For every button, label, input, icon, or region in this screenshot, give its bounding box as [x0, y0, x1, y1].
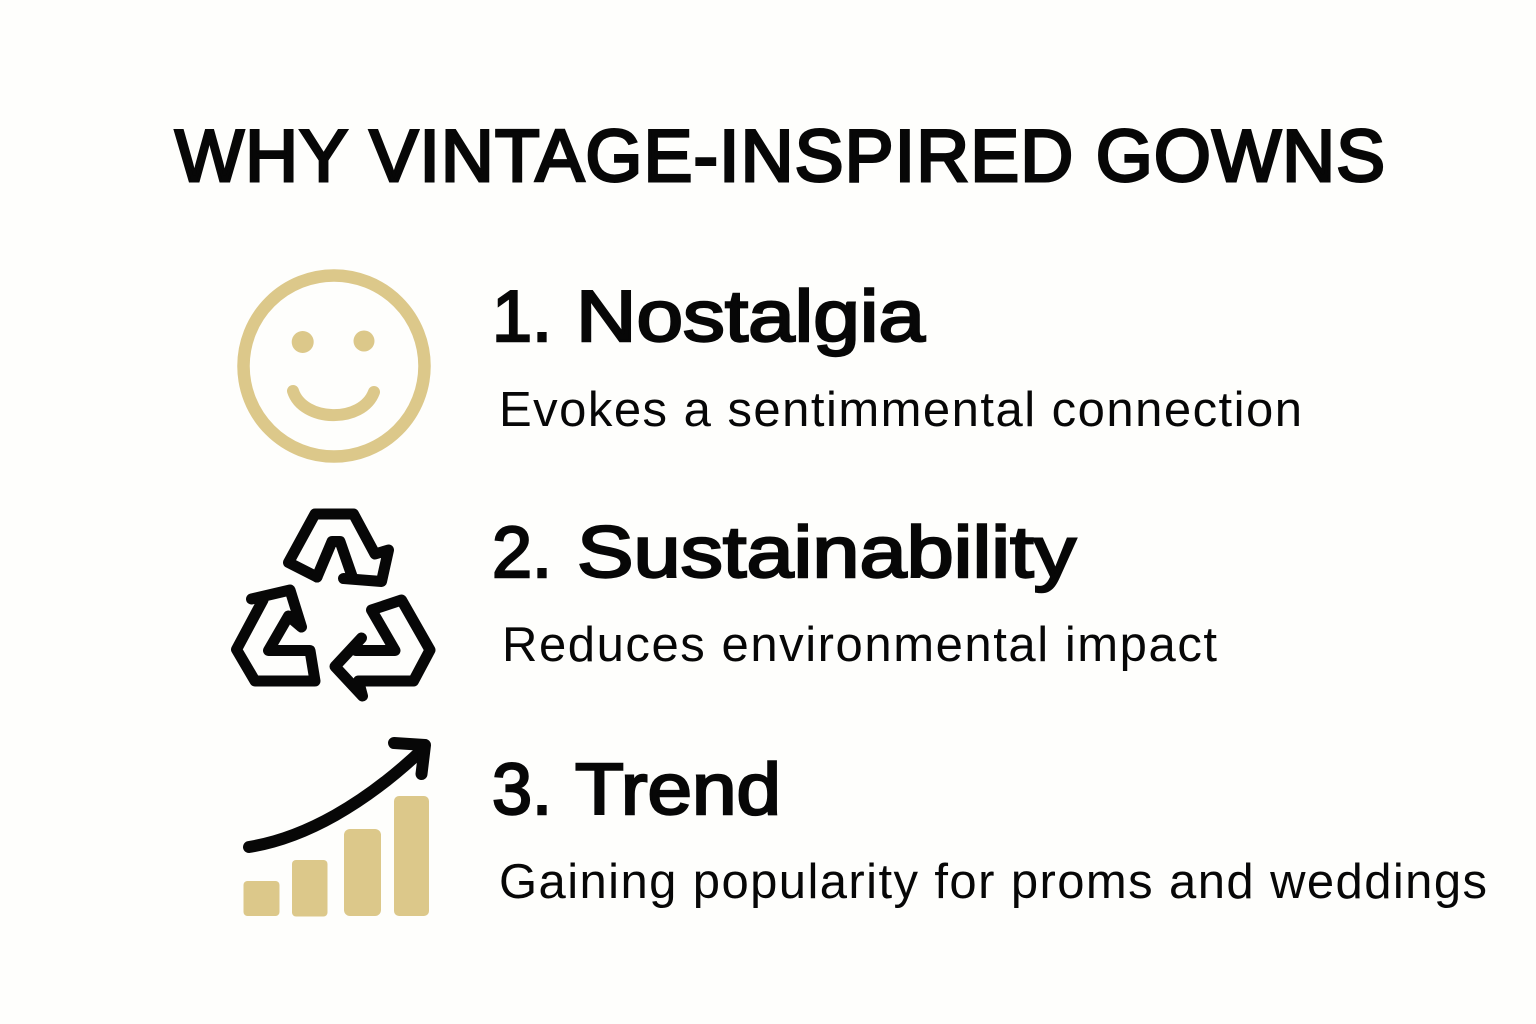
heading: sustainability: Sustainability [577, 513, 1076, 593]
icon: rising bar chart with arrow [244, 743, 429, 916]
icon: recycling arrows [236, 514, 430, 696]
item 3: trend [244, 743, 1487, 916]
heading: nostalgia [492, 277, 926, 357]
heading: nostalgia: 1. [492, 277, 552, 357]
heading: trend: Trend [575, 750, 781, 830]
description: nostalgia: Evokes a sentimmental connection [499, 383, 1302, 437]
heading: trend: 3. [492, 750, 552, 830]
description: sustainability: Reduces environmental impact [502, 618, 1217, 672]
bars [244, 796, 429, 916]
arrow [249, 743, 425, 847]
description: trend: Gaining popularity for proms and weddings [499, 855, 1487, 909]
icon: smiley face [244, 276, 424, 456]
item 1: nostalgia [244, 276, 1302, 456]
heading: sustainability: 2. [492, 513, 552, 593]
heading: trend [492, 750, 781, 830]
item 2: sustainability [236, 513, 1217, 696]
title: WHY VINTAGE-INSPIRED GOWNS [175, 116, 1385, 197]
heading: nostalgia: Nostalgia [576, 277, 926, 357]
